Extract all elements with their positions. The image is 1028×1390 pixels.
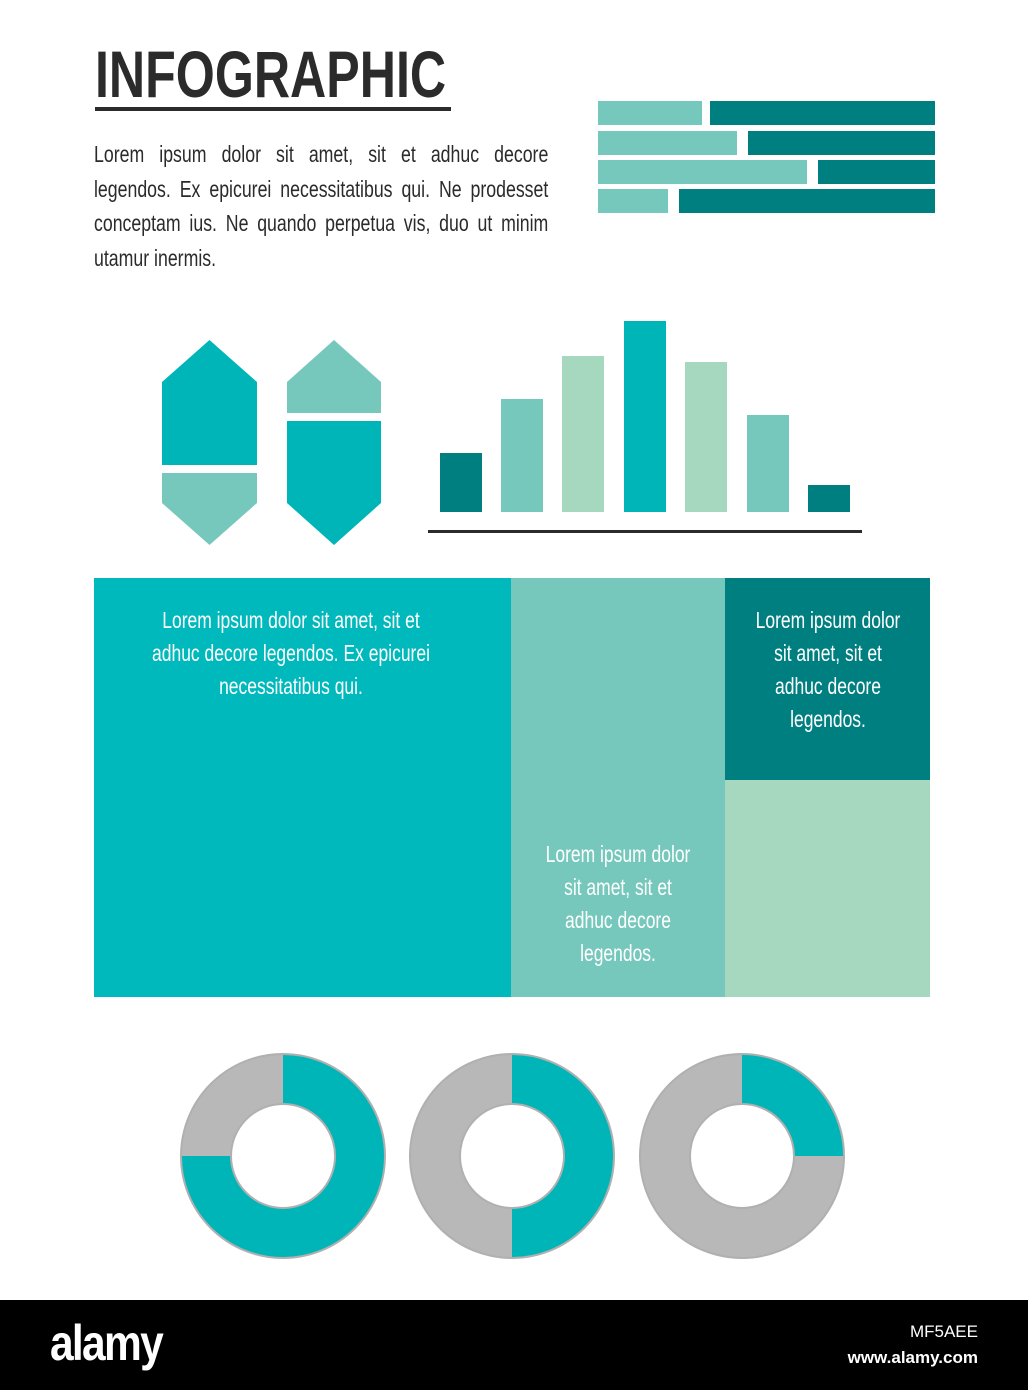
intro text xyxy=(94,141,548,270)
treemap block: light teal: legendos. xyxy=(580,940,656,966)
treemap block: light teal: sit amet, sit et xyxy=(564,874,672,900)
title: INFOGRAPHIC xyxy=(95,37,446,111)
donut 3 xyxy=(640,1054,844,1258)
intro text: conceptam ius. Ne quando perpetua vis, duo ut minim xyxy=(94,210,548,236)
icon: hexagon gauge 1 xyxy=(162,340,257,545)
footer bar: www.alamy.com xyxy=(848,1348,978,1367)
donut 2 xyxy=(410,1054,614,1258)
treemap block: large teal: necessitatibus qui. xyxy=(219,673,363,699)
intro text: Lorem ipsum dolor sit amet, sit et adhuc decore xyxy=(94,141,548,167)
icon: hexagon gauge 2 xyxy=(287,340,381,545)
treemap block: large teal: adhuc decore legendos. Ex epicurei xyxy=(152,640,430,666)
treemap block: large teal xyxy=(94,578,511,997)
treemap block: light teal xyxy=(511,578,725,997)
treemap block: dark teal: Lorem ipsum dolor xyxy=(756,607,900,633)
treemap block: dark teal xyxy=(725,578,930,780)
treemap xyxy=(94,578,930,997)
bar chart xyxy=(428,321,862,533)
intro text: legendos. Ex epicurei necessitatibus qui. Ne prodesset xyxy=(94,176,548,202)
footer bar: alamy xyxy=(50,1315,162,1371)
treemap block: dark teal: adhuc decore xyxy=(775,673,881,699)
treemap block: dark teal: legendos. xyxy=(790,706,866,732)
footer bar: MF5AEE xyxy=(910,1322,978,1341)
treemap block: light teal: adhuc decore xyxy=(565,907,671,933)
horizontal bar chart xyxy=(598,101,935,213)
footer bar xyxy=(0,1300,1028,1390)
donut 1 xyxy=(181,1054,385,1258)
treemap block: dark teal: sit amet, sit et xyxy=(774,640,882,666)
treemap block: pale green xyxy=(725,780,930,997)
intro text: utamur inermis. xyxy=(94,244,216,270)
treemap block: light teal: Lorem ipsum dolor xyxy=(546,841,690,867)
treemap block: large teal: Lorem ipsum dolor sit amet, sit et xyxy=(162,607,420,633)
